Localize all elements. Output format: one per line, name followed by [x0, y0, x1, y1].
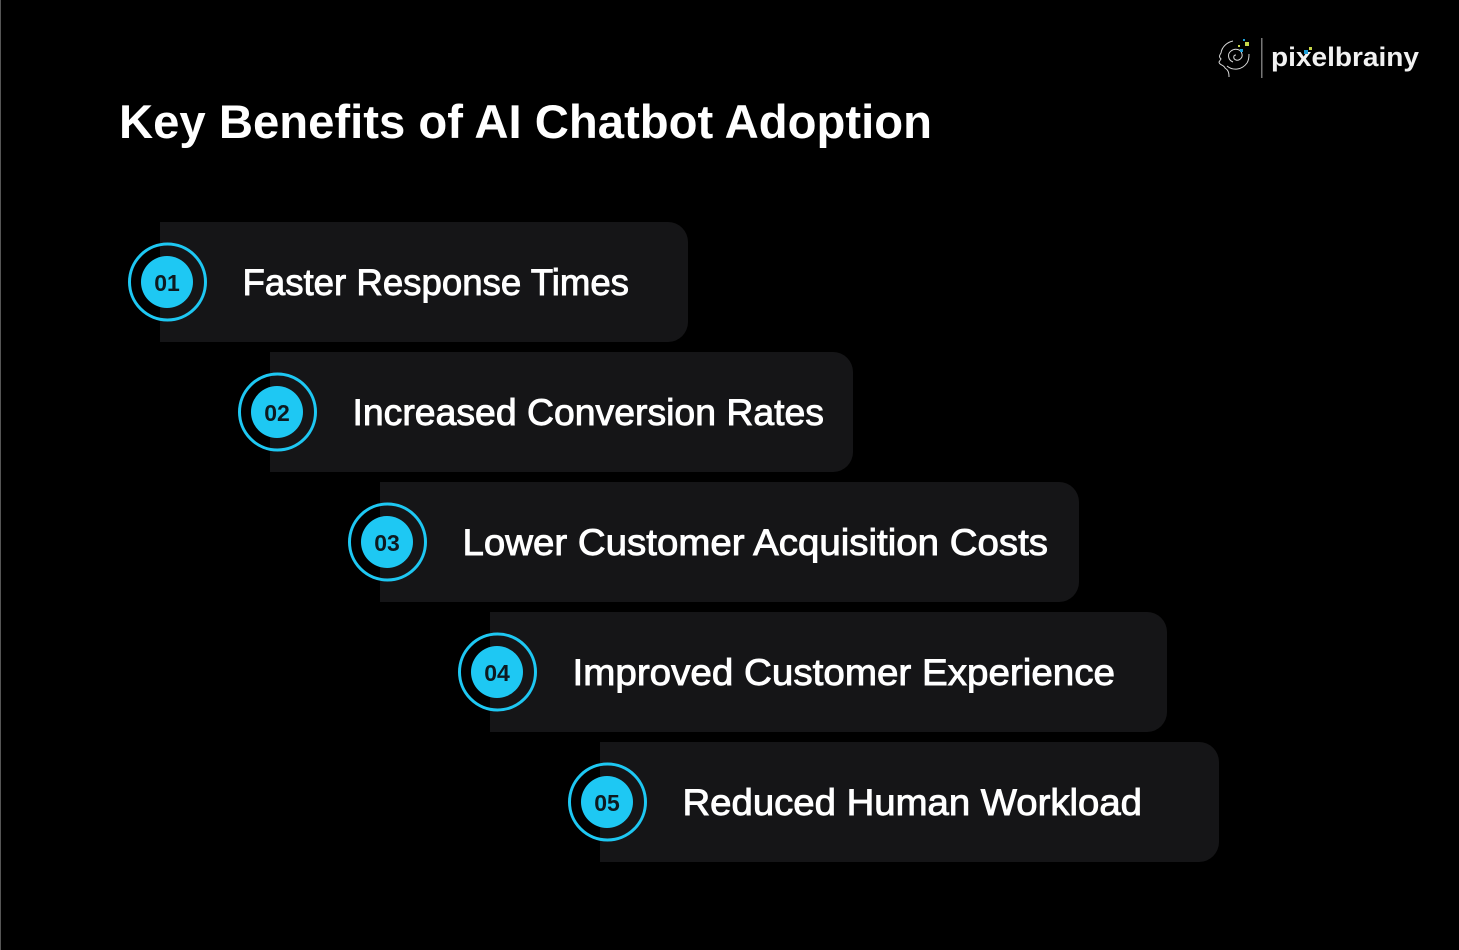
panel: [600, 742, 1219, 862]
icon: spiral head: [1219, 39, 1249, 77]
label: Reduced Human Workload: [682, 782, 1142, 823]
number badge: [570, 764, 646, 840]
logo divider: [1261, 38, 1262, 78]
logo accent dots: [1304, 47, 1312, 54]
item 1: [130, 222, 688, 342]
number badge: [460, 634, 536, 710]
panel: [270, 352, 853, 472]
logo: pixelbrainy: [1219, 38, 1419, 78]
number badge: 02: [264, 400, 290, 426]
label: Increased Conversion Rates: [352, 392, 824, 433]
number badge: 05: [594, 790, 620, 816]
number badge: 04: [484, 660, 510, 686]
label: Lower Customer Acquisition Costs: [462, 522, 1048, 563]
panel: [490, 612, 1167, 732]
number badge: 01: [154, 270, 180, 296]
item 3: [350, 482, 1079, 602]
label: Improved Customer Experience: [572, 652, 1115, 693]
title: Key Benefits of AI Chatbot Adoption: [119, 95, 932, 148]
item 5: [570, 742, 1219, 862]
number badge: [350, 504, 426, 580]
number badge: [240, 374, 316, 450]
number badge: 03: [374, 530, 400, 556]
panel: [380, 482, 1079, 602]
label: Faster Response Times: [242, 262, 629, 303]
logo wordmark: pixelbrainy: [1271, 42, 1419, 72]
item 4: [460, 612, 1167, 732]
panel: [160, 222, 688, 342]
item 2: [240, 352, 853, 472]
number badge: [130, 244, 206, 320]
